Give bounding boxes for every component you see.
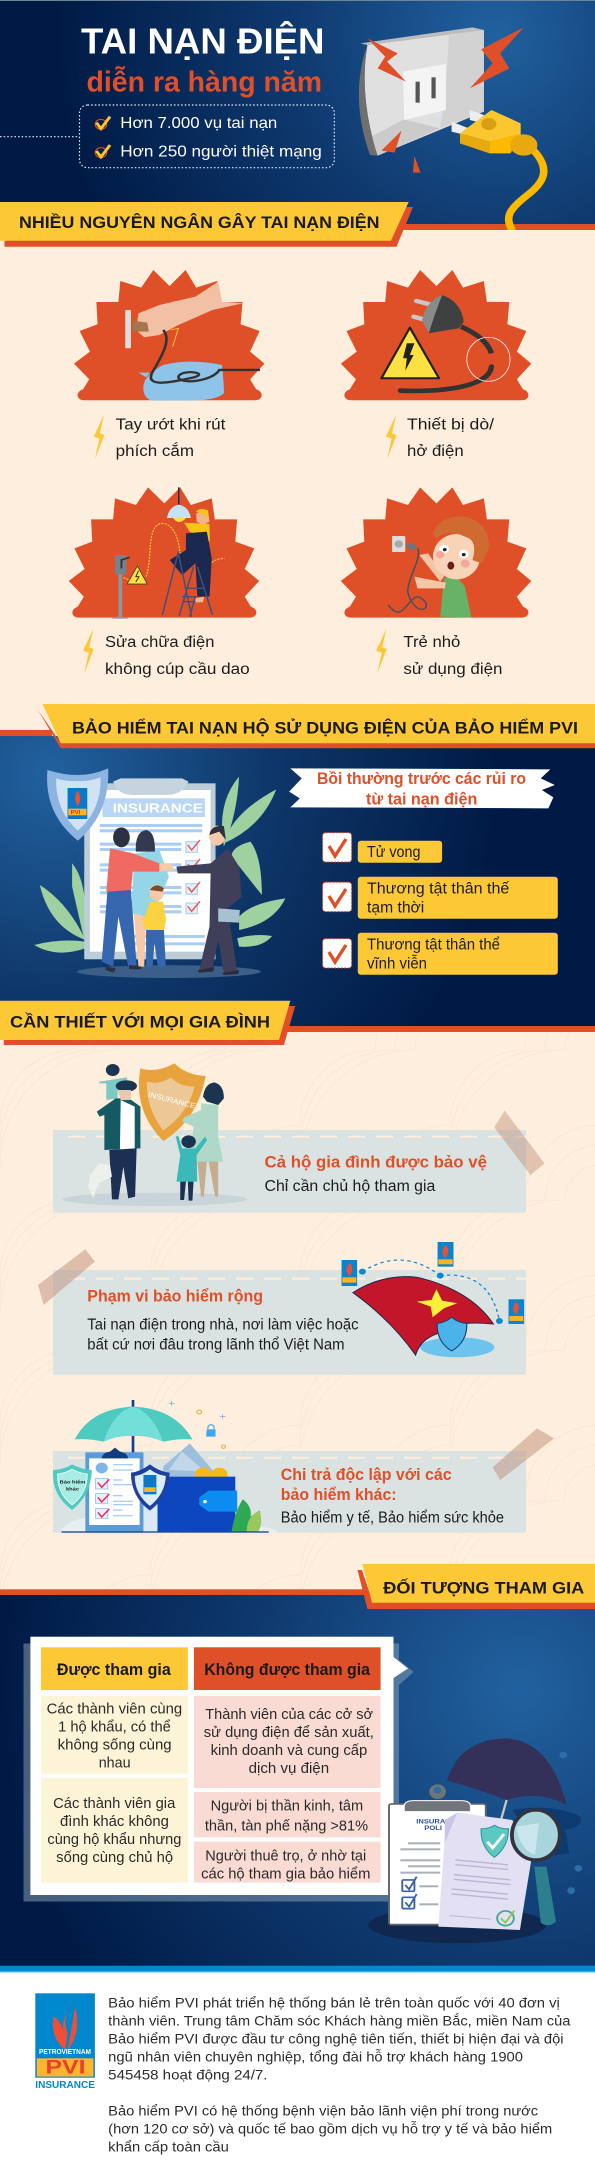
illustration: Vietnam flag map xyxy=(342,1242,524,1357)
column: not eligible: các hộ tham gia bảo hiểm xyxy=(201,1867,370,1883)
stat: accidents: Hơn 7.000 vụ tai nạn xyxy=(120,115,277,132)
label: children using electricity: Trẻ nhỏ xyxy=(403,634,460,651)
label: repairs without cutting power: Sửa chữa điện xyxy=(105,634,214,651)
label: repairs without cutting power: không cúp cầu dao xyxy=(105,661,250,678)
illustration: electrician repairing xyxy=(69,487,259,619)
banner: compensation heading: Bồi thường trước các rủi ro xyxy=(317,770,526,788)
card: independent payout: bảo hiểm khác: xyxy=(281,1486,397,1504)
text block: about PVI: ngũ nhân viên chuyên nghiệp, tổng đài hỗ trợ khách hàng 1900 xyxy=(108,2049,523,2065)
column: not eligible: Thành viên của các cở sở xyxy=(205,1707,373,1723)
card: wide coverage: Tai nạn điện trong nhà, nơi làm việc hoặc xyxy=(87,1316,359,1333)
card: wide coverage xyxy=(38,1242,526,1375)
heading: causes xyxy=(0,202,413,247)
text block: about PVI: (hơn 120 cơ sở) và quốc tế bao gồm dịch vụ hỗ trợ y tế và bảo hiểm xyxy=(108,2121,552,2137)
column: eligible: cùng hộ khẩu nhưng xyxy=(47,1832,181,1848)
card: wide coverage: Phạm vi bảo hiểm rộng xyxy=(87,1288,263,1306)
label: children using electricity: sử dụng điện xyxy=(403,661,502,678)
text block: about PVI: Bảo hiểm PVI có hệ thống bệnh viện bảo lãnh viện phí trong nước xyxy=(108,2103,538,2119)
label: leaking device xyxy=(386,415,495,460)
card: independent payout: Chi trả độc lập với các xyxy=(281,1466,452,1484)
text block: about PVI: khẩn cấp toàn cầu xyxy=(108,2139,229,2155)
item: permanent injury: Thương tật thân thể xyxy=(367,936,500,953)
column: eligible xyxy=(41,1647,188,1883)
illustration: umbrella, clipboard and wallet: khác xyxy=(66,1487,79,1493)
heading: participants: ĐỐI TƯỢNG THAM GIA xyxy=(383,1577,584,1597)
column: not eligible: dịch vụ điện xyxy=(249,1761,329,1777)
illustration: family signing insurance: PVI xyxy=(71,810,81,816)
column: eligible: sống cùng chủ hộ xyxy=(56,1850,173,1866)
text block: about PVI xyxy=(108,1995,571,2155)
banner: compensation heading xyxy=(289,768,555,808)
label: leaking device: hở điện xyxy=(407,443,464,460)
card: whole household protected: Chỉ cần chủ hộ tham gia xyxy=(264,1178,436,1195)
card: whole household protected: Cả hộ gia đình được bảo vệ xyxy=(264,1154,487,1172)
item: death xyxy=(323,833,442,863)
column: eligible: Các thành viên gia xyxy=(53,1796,176,1812)
text block: about PVI: Bảo hiểm PVI được đầu tư công nghệ tiên tiến, thiết bị hiện đại và đội xyxy=(108,2031,564,2047)
column: eligible: 1 hộ khẩu, có thể xyxy=(58,1719,171,1735)
card: whole household protected xyxy=(53,1063,545,1213)
panel: eligibility background xyxy=(0,1589,595,1966)
text block: about PVI: 545458 hoạt động 24/7. xyxy=(108,2067,268,2083)
illustration: policy documents, umbrella and magnifier: INSURA xyxy=(416,1818,445,1825)
table: who can participate xyxy=(24,1637,414,1902)
illustration: family signing insurance: INSURANCE xyxy=(113,801,203,816)
heading: necessary for every family: CẦN THIẾT VỚI MỌI GIA ĐÌNH xyxy=(10,1012,270,1031)
label: leaking device: Thiết bị dò/ xyxy=(407,416,495,433)
label: repairs without cutting power xyxy=(83,629,250,678)
label: wet hands: phích cắm xyxy=(116,443,194,460)
panel: insurance background xyxy=(0,730,595,1032)
illustration: umbrella, clipboard and wallet: Bảo hiểm xyxy=(60,1479,86,1485)
label: wet hands: Tay ướt khi rút xyxy=(116,416,226,433)
hero bottom stripe xyxy=(0,224,595,230)
column: eligible: không sống cùng xyxy=(58,1737,172,1753)
title: TAI NẠN ĐIỆN xyxy=(81,19,324,61)
heading: PVI insurance xyxy=(38,704,595,748)
logo: PVI insurance: PETROVIETNAM xyxy=(39,2047,91,2056)
card: independent payout: Bảo hiểm y tế, Bảo hiểm sức khỏe xyxy=(281,1510,504,1527)
illustration: policy documents, umbrella and magnifier xyxy=(368,1738,582,1943)
illustration: child touching plug xyxy=(341,487,531,618)
item: permanent injury: vĩnh viễn xyxy=(367,956,427,973)
illustration: family with shield: INSURANCE xyxy=(147,1090,197,1110)
card: independent payout xyxy=(53,1400,554,1533)
panel: causes background xyxy=(0,230,595,736)
label: wet hands xyxy=(94,415,226,460)
icon: check one xyxy=(95,117,110,129)
column: not eligible: sử dụng điện để sản xuất, xyxy=(204,1725,374,1741)
logo: PVI insurance xyxy=(35,1993,95,2091)
stat: deaths: Hơn 250 người thiệt mạng xyxy=(120,144,322,161)
column: not eligible: Người bị thần kinh, tâm xyxy=(211,1799,363,1815)
label: children using electricity xyxy=(376,629,502,678)
item: temporary injury: tạm thời xyxy=(367,900,424,917)
text block: about PVI: thành viên. Trung tâm Chăm sóc Khách hàng miền Bắc, miền Nam của xyxy=(108,2013,571,2029)
heading: PVI insurance: BẢO HIỂM TAI NẠN HỘ SỬ DỤNG ĐIỆN CỦA BẢO HIỂM PVI xyxy=(72,718,578,737)
banner: compensation heading: từ tai nạn điện xyxy=(366,790,477,808)
card: wide coverage: bất cứ nơi đâu trong lãnh thổ Việt Nam xyxy=(87,1336,345,1353)
icon: check two xyxy=(95,145,110,158)
column: not eligible: Không được tham gia xyxy=(204,1660,371,1679)
illustration: policy documents, umbrella and magnifier: POLI xyxy=(424,1824,442,1832)
item: temporary injury xyxy=(323,877,558,919)
footer blue stripe xyxy=(0,1966,595,1973)
heading: participants xyxy=(358,1564,595,1609)
column: eligible: nhau xyxy=(99,1755,131,1771)
text block: about PVI: Bảo hiểm PVI phát triển hệ thống bán lẻ trên toàn quốc với 40 đơn vị xyxy=(108,1995,560,2011)
illustration: leaking device xyxy=(341,270,531,400)
column: not eligible: thần, tàn phế nặng >81% xyxy=(205,1819,368,1835)
item: permanent injury xyxy=(323,933,558,975)
panel: necessary background xyxy=(0,1032,595,1595)
logo: PVI insurance: PVI xyxy=(46,2058,86,2078)
panel: hero xyxy=(0,0,595,231)
subtitle: diễn ra hàng năm xyxy=(86,65,322,99)
column: not eligible: Người thuê trọ, ở nhờ tại xyxy=(205,1849,366,1865)
heading: necessary for every family xyxy=(0,1001,295,1045)
column: not eligible: kinh doanh và cung cấp xyxy=(211,1743,367,1759)
item: death: Tử vong xyxy=(367,844,420,861)
column: eligible: Được tham gia xyxy=(57,1660,171,1679)
logo: PVI insurance: INSURANCE xyxy=(35,2080,95,2091)
illustration: wet hands unplugging xyxy=(74,270,265,401)
column: eligible: Các thành viên cùng xyxy=(47,1701,182,1717)
item: temporary injury: Thương tật thân thế xyxy=(367,880,510,897)
column: eligible: đình khác không xyxy=(60,1814,169,1830)
dotted stats box xyxy=(0,105,334,168)
column: not eligible xyxy=(194,1647,381,1883)
illustration: family with shield xyxy=(63,1063,247,1206)
icon: broken socket and plug xyxy=(359,27,544,231)
illustration: family signing insurance xyxy=(34,768,285,978)
illustration: umbrella, clipboard and wallet xyxy=(53,1400,279,1533)
heading: causes: NHIỀU NGUYÊN NGÂN GÂY TAI NẠN ĐIỆN xyxy=(19,213,380,232)
